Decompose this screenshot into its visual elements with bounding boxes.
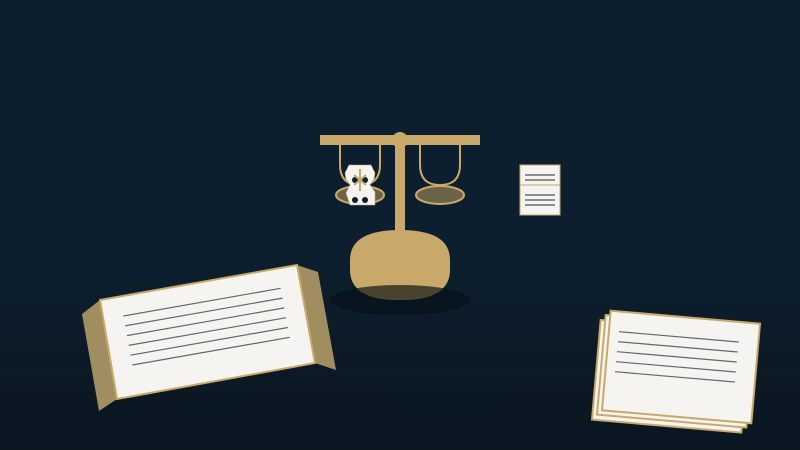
skull join	[351, 183, 369, 187]
illustration: scales of justice with documents	[0, 132, 800, 450]
upper skull	[345, 165, 375, 185]
balance scale	[320, 132, 480, 315]
lower document lines	[525, 195, 555, 205]
right pan strings	[420, 145, 460, 185]
left pan	[336, 186, 384, 204]
beam pivot	[392, 132, 408, 148]
open book	[82, 265, 336, 411]
back card	[592, 320, 750, 433]
right cover flap	[297, 265, 336, 370]
right pan	[416, 186, 464, 204]
lower document	[520, 185, 560, 215]
book page	[100, 265, 315, 399]
front card	[602, 311, 760, 423]
left cover flap	[82, 300, 117, 411]
lower skull	[346, 185, 375, 205]
scale beam	[320, 135, 480, 145]
shadow on base	[357, 285, 443, 300]
documents on right	[520, 165, 560, 215]
stacked cards	[592, 311, 760, 433]
card text lines	[615, 332, 739, 382]
left pan strings	[340, 145, 380, 185]
scale post	[395, 140, 405, 232]
lower eyes	[352, 197, 368, 203]
upper eyes	[352, 177, 368, 183]
middle card	[597, 315, 755, 428]
asterisk crack	[354, 169, 366, 191]
upper document lines	[525, 175, 555, 180]
icon: skull stack on left pan	[345, 165, 375, 205]
base shadow	[330, 285, 470, 315]
scale base	[350, 230, 450, 300]
book text lines	[123, 288, 290, 365]
upper document	[520, 165, 560, 195]
